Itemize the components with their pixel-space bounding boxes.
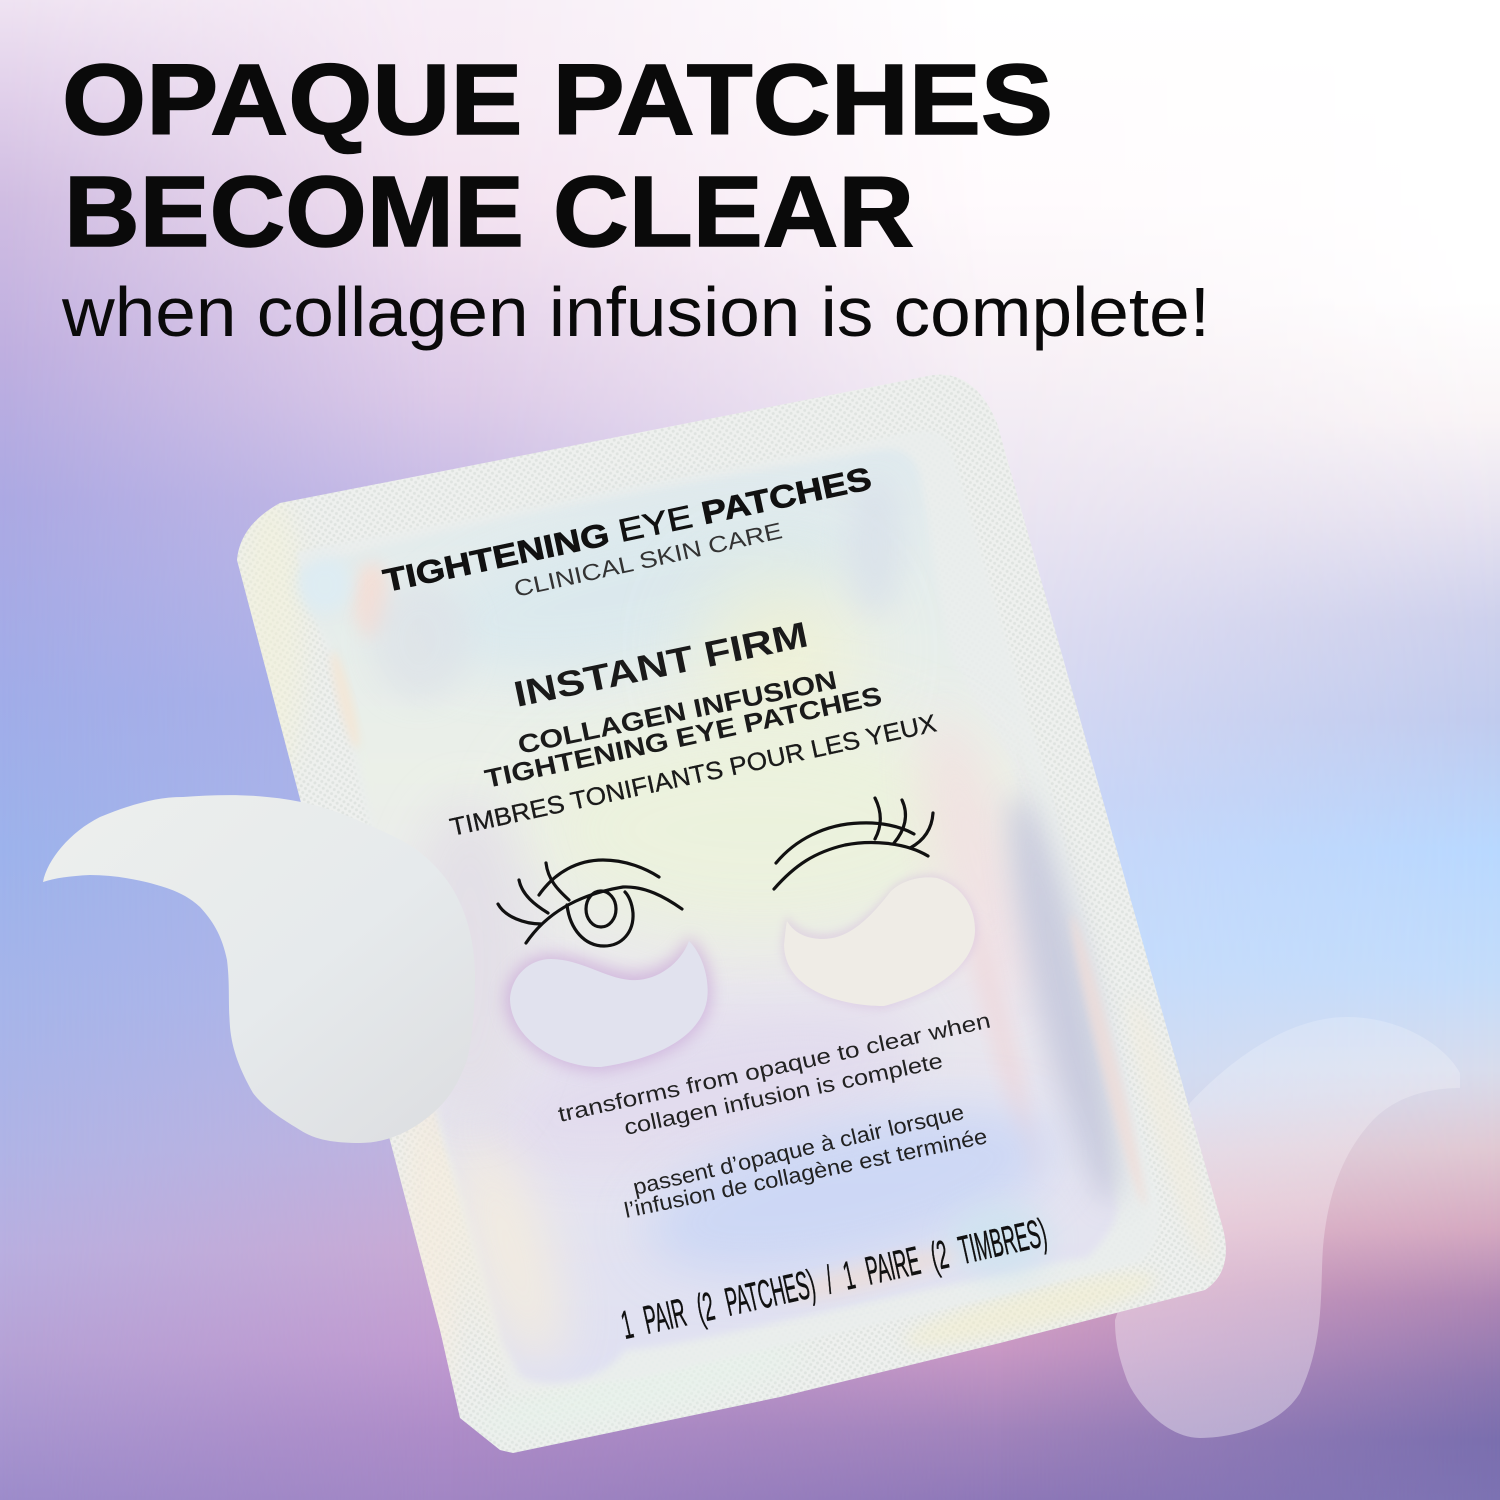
smooth inner seam band — [296, 431, 1160, 1392]
packet text: instructions english: transforms from opaque to clear when — [556, 1008, 993, 1127]
crimped seam texture — [230, 370, 1235, 1460]
seam iridescence — [241, 506, 302, 756]
iridescent pouch — [458, 452, 1113, 1382]
heading: OPAQUE PATCHES — [62, 44, 1053, 156]
patch on right eye — [781, 874, 978, 1010]
eye illustration: closed eye — [774, 798, 933, 889]
packet text: instructions english — [556, 1008, 993, 1140]
packet text: instructions french: passent d’opaque à clair lorsque — [631, 1099, 966, 1200]
heading — [61, 44, 1210, 351]
packet text: product description — [482, 665, 884, 794]
packet body — [237, 375, 1226, 1453]
eye illustration: open eye — [498, 860, 682, 946]
packet text: product name: INSTANT FIRM — [510, 614, 811, 715]
packet text: product description: TIGHTENING EYE PATCHES — [482, 680, 884, 794]
foil packet — [230, 370, 1235, 1460]
packet text: product description: COLLAGEN INFUSION — [515, 665, 839, 760]
packet text: brand: TIGHTENING EYE PATCHES — [380, 460, 875, 599]
packet text: instructions english: collagen infusion is complete — [622, 1048, 945, 1140]
rainbow tints — [472, 545, 740, 662]
packet text: french name: TIMBRES TONIFIANTS POUR LES YEUX — [447, 709, 939, 842]
packet text: clinical skin care: CLINICAL SKIN CARE — [511, 517, 785, 602]
patch on left eye — [505, 936, 712, 1071]
packet text: instructions french: l’infusion de collagène est terminée — [622, 1123, 989, 1223]
eye patch: opaque, in front of packet — [43, 795, 475, 1143]
heading: BECOME CLEAR — [64, 156, 914, 268]
eye patch: translucent, behind packet — [1115, 1017, 1460, 1438]
heading: when collagen infusion is complete! — [61, 273, 1210, 351]
